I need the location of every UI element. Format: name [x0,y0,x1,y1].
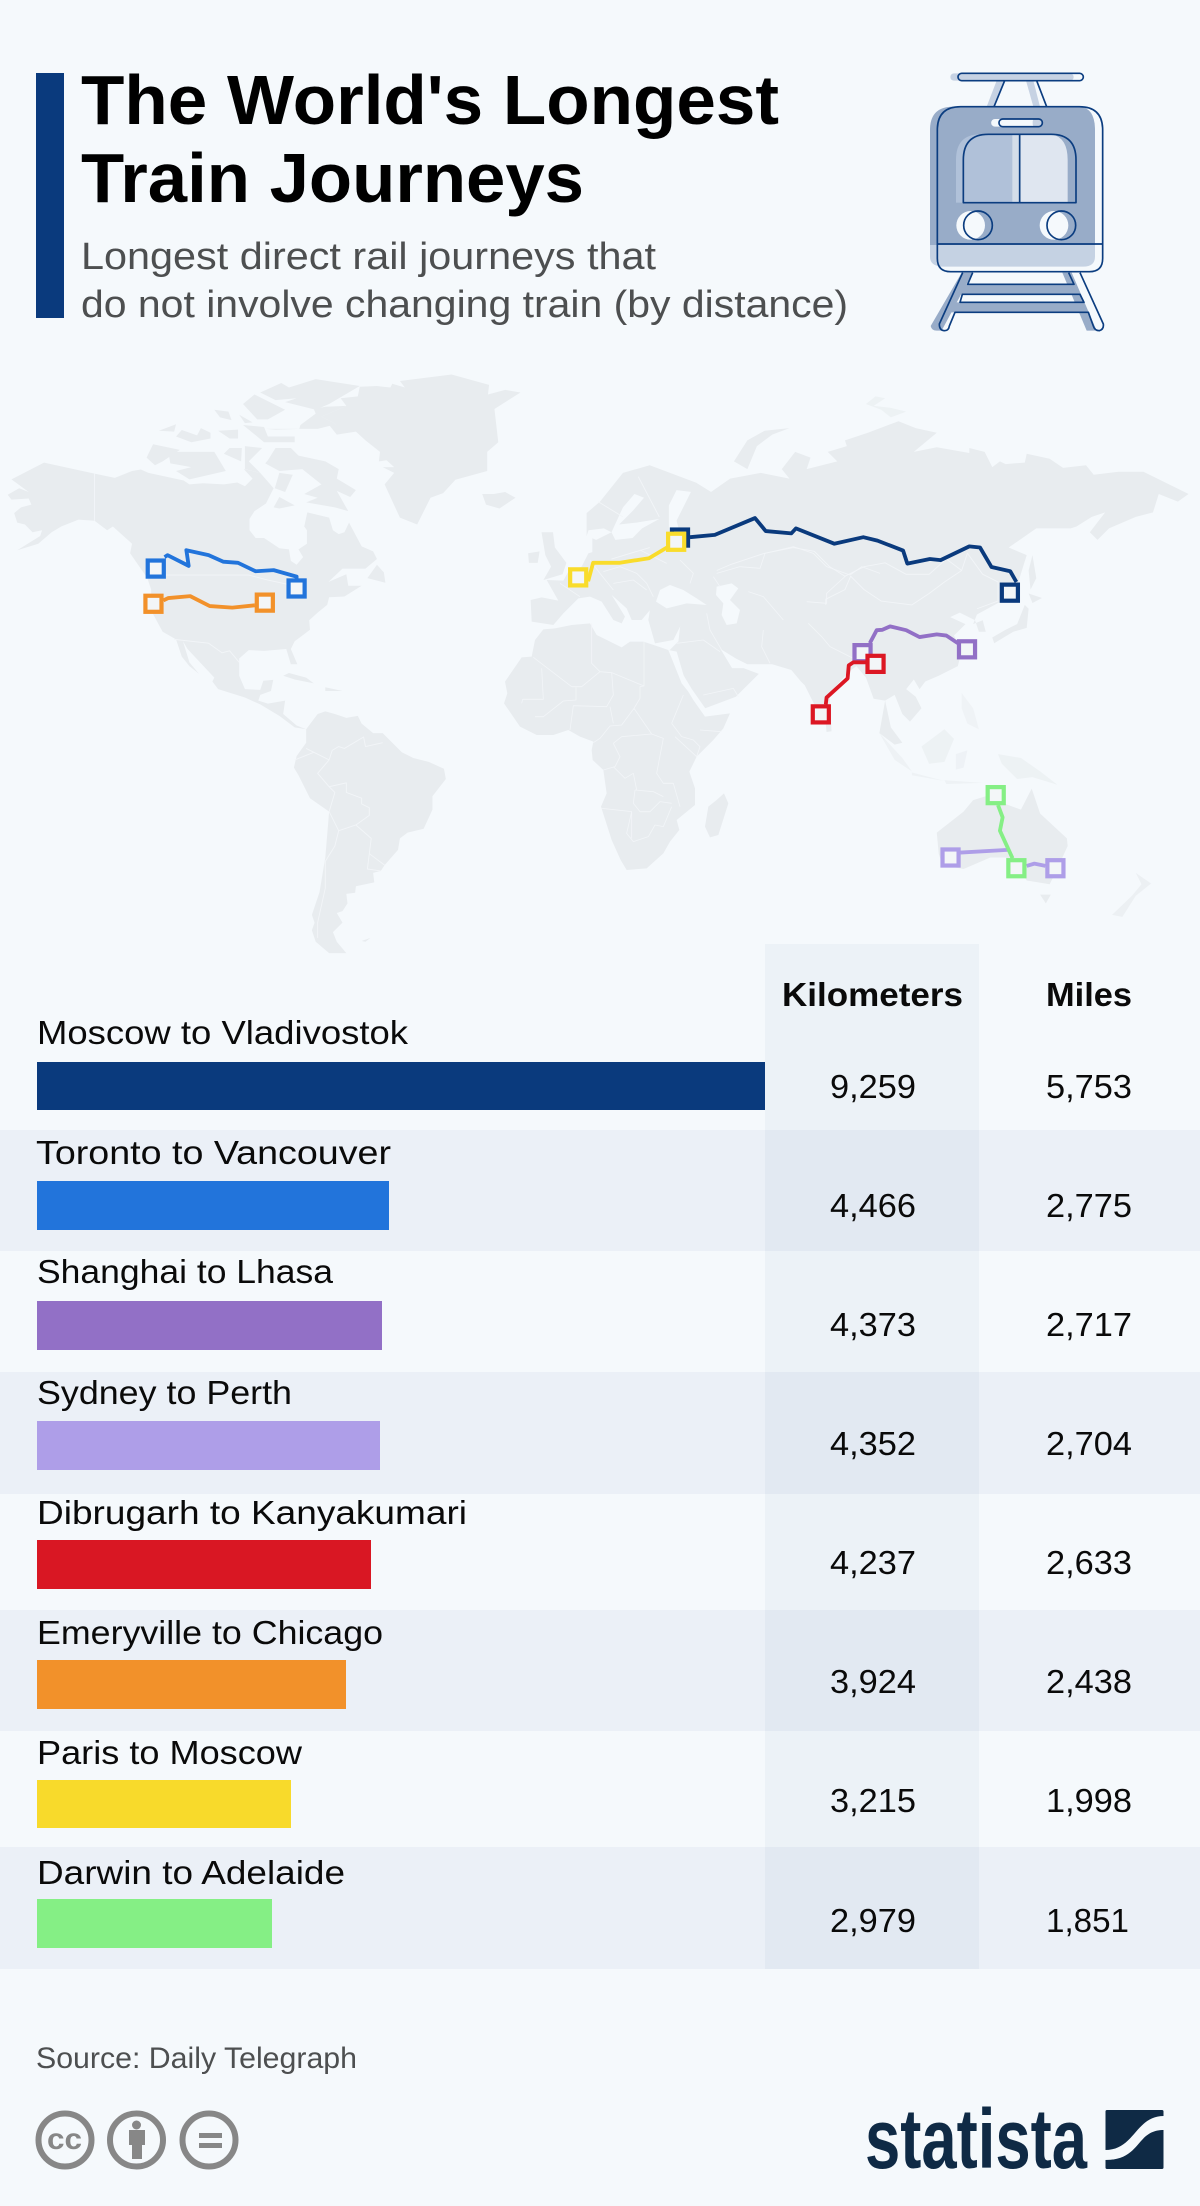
route: Darwin to Adelaide [988,787,1024,876]
row: Emeryville to Chicago [37,1614,1132,1709]
row: Toronto to Vancouver [36,1134,1132,1230]
row: Darwin to Adelaide: 1,851 [1046,1902,1129,1939]
row: Moscow to Vladivostok [37,1014,1132,1110]
route: Paris to Moscow [570,534,684,585]
row: Dibrugarh to Kanyakumari [37,1494,1132,1589]
row: Shanghai to Lhasa: 4,373 [830,1306,916,1343]
subtitle: Longest direct rail journeys that [81,236,656,278]
table striped row backgrounds [0,1130,1200,1969]
row: Sydney to Perth: 2,704 [1046,1425,1132,1462]
row: Toronto to Vancouver: 2,775 [1046,1187,1132,1224]
row: Dibrugarh to Kanyakumari: 4,237 [830,1544,916,1581]
land: Asia and Oceania [587,396,1189,917]
row: Emeryville to Chicago: Emeryville to Chicago [37,1614,383,1651]
source: Source: Daily Telegraph [36,2042,357,2075]
icon: creative commons licence [38,2114,236,2166]
seas and borders [95,474,998,938]
row: Paris to Moscow [37,1734,1132,1828]
row: Paris to Moscow: Paris to Moscow [37,1734,302,1771]
title [81,61,779,217]
row: Moscow to Vladivostok: 9,259 [830,1068,916,1105]
row: Sydney to Perth: Sydney to Perth [37,1374,292,1411]
row: Dibrugarh to Kanyakumari: 2,633 [1046,1544,1132,1581]
row: Emeryville to Chicago: 2,438 [1046,1663,1132,1700]
row: Toronto to Vancouver: 4,466 [830,1187,916,1224]
kilometers column highlight [765,944,979,1969]
row: Paris to Moscow: 3,215 [830,1782,916,1819]
title: The World's Longest [81,61,779,139]
title: Train Journeys [81,139,584,217]
row: Darwin to Adelaide: 2,979 [830,1902,916,1939]
world map [8,375,1189,953]
row: Toronto to Vancouver: Toronto to Vancouver [36,1134,391,1171]
row: Sydney to Perth [37,1374,1132,1470]
row: Moscow to Vladivostok: 5,753 [1046,1068,1132,1105]
route: Shanghai to Lhasa [854,626,975,661]
column heading: Kilometers: Kilometers [782,976,963,1013]
row: Moscow to Vladivostok: Moscow to Vladivostok [37,1014,409,1051]
route: Emeryville to Chicago [145,595,273,612]
logo: statista: statista [865,2092,1088,2186]
column heading: Miles: Miles [1046,976,1132,1013]
route: Moscow to Vladivostok [672,518,1018,601]
subtitle: do not involve changing train (by distance) [81,284,848,326]
row: Darwin to Adelaide: Darwin to Adelaide [37,1854,345,1891]
row: Shanghai to Lhasa: 2,717 [1046,1306,1132,1343]
row: Shanghai to Lhasa: Shanghai to Lhasa [37,1253,334,1290]
header accent bar [36,73,64,318]
row: Emeryville to Chicago: 3,924 [830,1663,916,1700]
row: Shanghai to Lhasa [37,1253,1132,1350]
row: Sydney to Perth: 4,352 [830,1425,916,1462]
route: Toronto to Vancouver [148,550,305,597]
route: Dibrugarh to Kanyakumari [813,656,884,722]
icon: creative commons licence: cc [47,2123,82,2156]
subtitle [81,236,848,326]
row: Darwin to Adelaide [37,1854,1129,1948]
icon: train [930,73,1103,331]
land: Africa and Europe [504,537,730,870]
row: Dibrugarh to Kanyakumari: Dibrugarh to Kanyakumari [37,1494,467,1531]
land: Americas [8,375,566,953]
route: Sydney to Perth [943,849,1063,876]
row: Paris to Moscow: 1,998 [1046,1782,1132,1819]
